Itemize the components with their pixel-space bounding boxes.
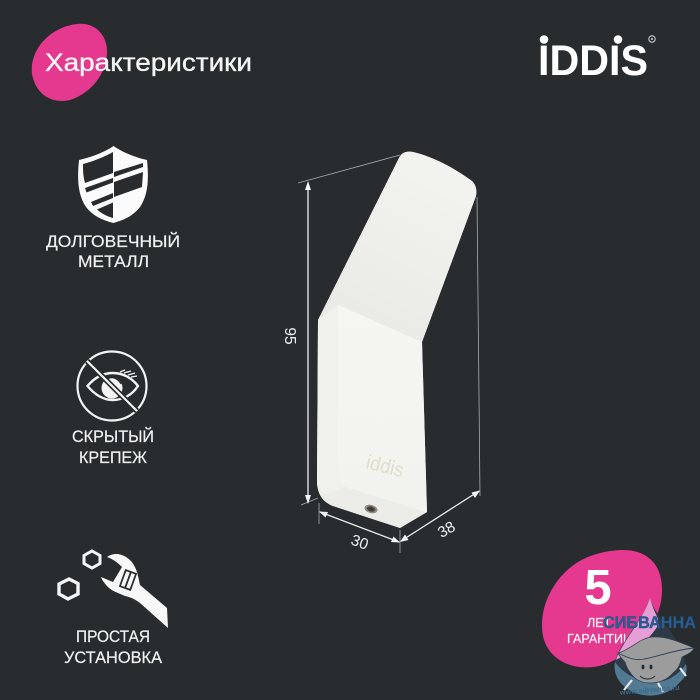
heading: Характеристики with pink blob (32, 24, 252, 101)
label: simple installation: ПРОСТАЯ (76, 628, 150, 646)
watermark lower ring (615, 662, 687, 696)
watermark drop over badge (616, 598, 658, 660)
label: hidden fastening: СКРЫТЫЙ (72, 427, 154, 446)
heading text: Характеристики (45, 49, 252, 77)
watermark tub (618, 637, 694, 683)
warranty label: ЛЕТ (587, 616, 612, 630)
watermark face (640, 665, 655, 679)
dimension: width 30 (319, 503, 400, 554)
dimension: width 30: 30 (349, 532, 371, 554)
feature: hidden fastening (72, 352, 154, 467)
pink blob (542, 550, 662, 667)
label: simple installation (64, 628, 162, 667)
label: durable metal (46, 232, 180, 271)
dimension: depth 38 (400, 197, 480, 542)
watermark url: www.sibvanna.ru (618, 683, 680, 697)
left side face (317, 305, 345, 506)
front face (338, 305, 427, 512)
warranty label (567, 616, 632, 646)
warranty label: ГАРАНТИИ (567, 632, 632, 646)
upper arm face (318, 152, 476, 342)
dimension lines (281, 155, 480, 554)
feature: simple installation (59, 551, 168, 667)
warranty badge (542, 550, 662, 667)
dimension: depth 38: 38 (435, 518, 458, 542)
bottom face (320, 487, 427, 528)
label: durable metal: МЕТАЛЛ (78, 253, 149, 271)
nut bottom (59, 579, 78, 599)
product: white wall hook (317, 152, 476, 528)
icon: wrench and nuts (59, 551, 168, 628)
logo: IDDIS: IDDIS (538, 37, 648, 85)
icon: shield (78, 146, 148, 223)
warranty number: 5 (584, 561, 612, 615)
dimension: height 95: 95 (281, 327, 298, 345)
feature: durable metal (46, 146, 180, 271)
wrench adjuster slot (120, 570, 136, 590)
watermark drop (615, 598, 685, 696)
label: hidden fastening: КРЕПЕЖ (79, 449, 148, 467)
pink blob behind heading (32, 24, 107, 101)
icon: crossed-out eye (78, 352, 146, 420)
nut top (84, 551, 100, 568)
hook logo mark: iddis (364, 452, 406, 482)
mounting screw (364, 504, 378, 514)
watermark: Sibvanna (603, 598, 696, 697)
label: hidden fastening (72, 427, 154, 467)
label: simple installation: УСТАНОВКА (64, 649, 162, 667)
dimension: height 95 (281, 155, 400, 505)
watermark feet (624, 668, 686, 692)
hook silhouette (317, 152, 476, 528)
watermark name: СИБВАННА (603, 613, 696, 632)
label: durable metal: ДОЛГОВЕЧНЫЙ (46, 232, 180, 251)
